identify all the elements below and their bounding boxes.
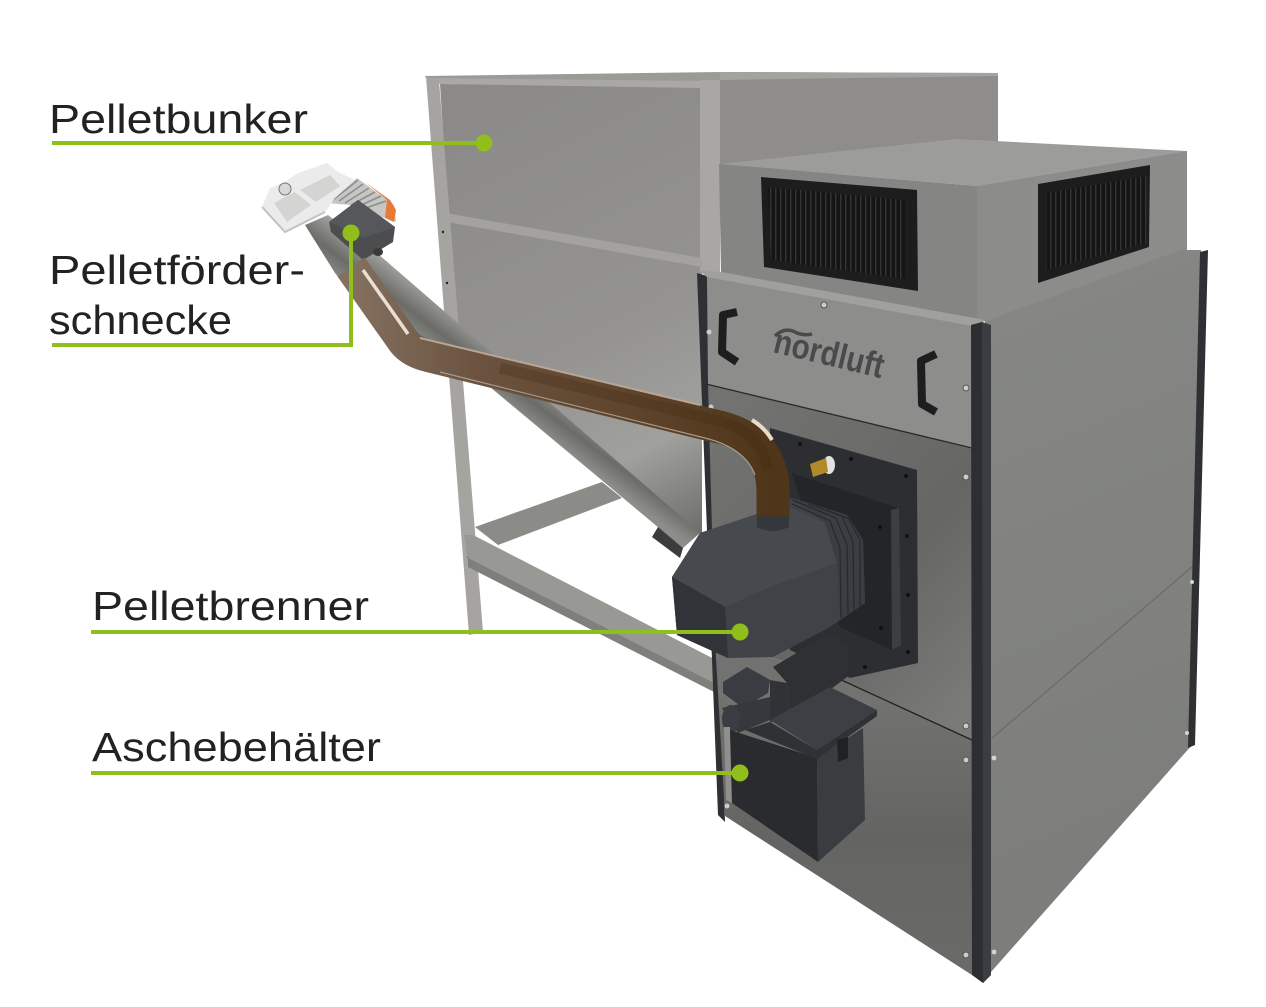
burner housing top box with grilles xyxy=(719,139,1187,324)
cabinet front panels xyxy=(697,270,991,983)
logo: nordluft: nordluft xyxy=(770,322,888,386)
pipe: brown feed hose xyxy=(351,267,789,531)
label: Pelletbunker xyxy=(49,96,492,152)
label: Pelletförderschnecke xyxy=(49,224,360,345)
motor gearbox xyxy=(262,163,396,260)
label: Pelletförderschnecke: schnecke xyxy=(49,297,232,343)
label: Pelletbunker: Pelletbunker xyxy=(49,96,308,142)
label: Pelletförderschnecke: Pelletförder- xyxy=(49,247,305,293)
label: Aschebehälter: Aschebehälter xyxy=(92,724,381,770)
label: Pelletbrenner xyxy=(91,583,748,640)
cabinet side panel xyxy=(977,151,1208,972)
label: Pelletbrenner: Pelletbrenner xyxy=(92,583,369,629)
hopper: Pelletbunker xyxy=(425,72,998,635)
burner mounting plate xyxy=(770,428,918,678)
support frame beams xyxy=(464,482,720,695)
conveyor screw tube xyxy=(305,215,700,558)
label: Aschebehälter xyxy=(91,724,748,782)
ash container xyxy=(724,687,877,862)
ash auger motor xyxy=(722,633,847,733)
icon: door handles xyxy=(722,312,936,412)
pellet burner xyxy=(672,498,865,658)
